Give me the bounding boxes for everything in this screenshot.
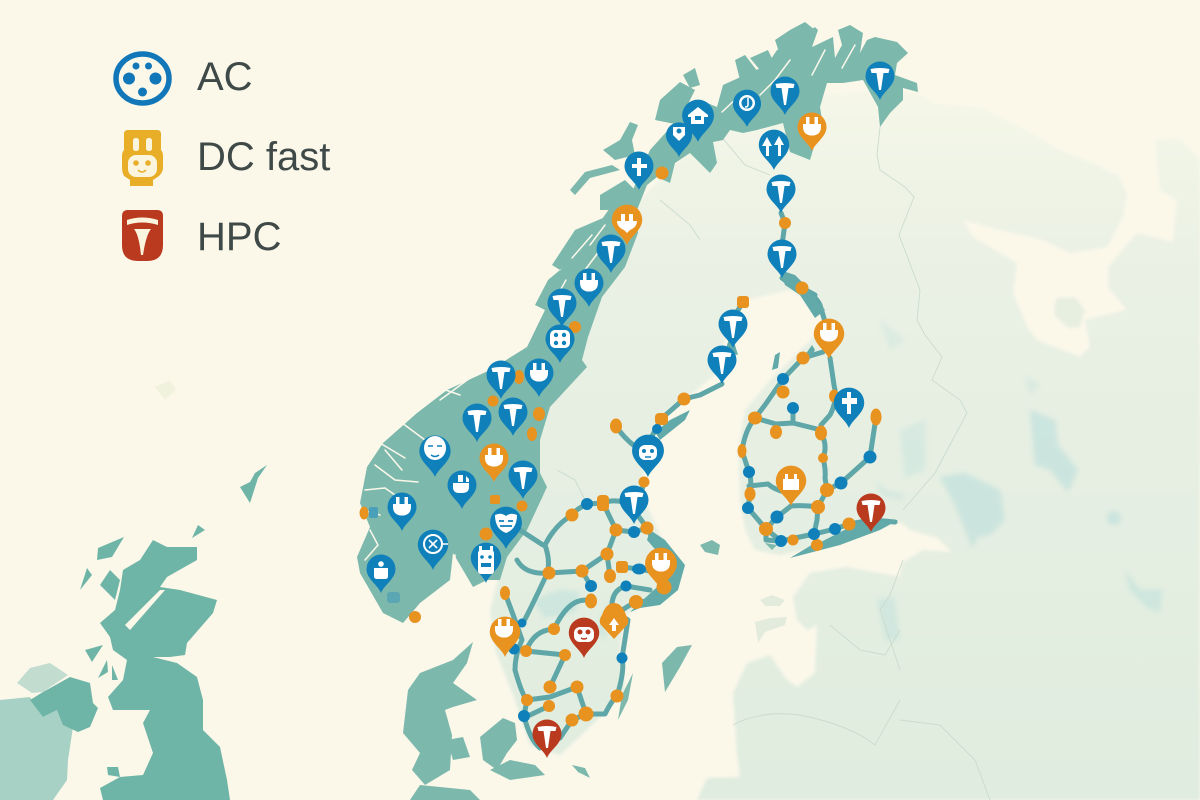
pin: AC southwest cup (366, 554, 396, 593)
pin: DC small arrow (600, 603, 628, 639)
pin: AC east Finland (834, 388, 864, 428)
pin: AC Bothnia T lower (708, 346, 736, 384)
Finland network (814, 358, 835, 534)
pin: DC Gothenburg (490, 617, 520, 657)
map: pale Baltic islands (755, 595, 787, 643)
pin: DC Oulu (814, 319, 844, 359)
road network (505, 213, 895, 748)
pin: AC face (419, 435, 451, 477)
legend label: AC: AC (197, 55, 253, 99)
pin: AC central Norway plug (524, 358, 554, 397)
pin: AC mask (490, 507, 522, 549)
pin: AC Lapland lower (768, 240, 796, 278)
pin: AC T right (498, 398, 528, 436)
icon: AC connector (116, 54, 169, 103)
map: Denmark and southern Baltic islands (403, 540, 777, 800)
icon: HPC connector (122, 210, 163, 261)
Sweden network (610, 510, 667, 625)
pin: AC Lapland upper (766, 174, 796, 213)
pin: AC Narvik house (682, 100, 714, 142)
pin: AC plug west (388, 492, 416, 531)
borders (557, 127, 990, 800)
pin: DC north (798, 112, 826, 151)
pin: AC far north (866, 62, 894, 100)
map: Ireland (0, 663, 98, 800)
pin: AC Tromsø (733, 90, 761, 127)
pin: HPC Helsinki (856, 494, 886, 532)
pin: AC roundel (418, 530, 448, 570)
legend label: HPC: HPC (197, 215, 281, 259)
pin: AC T left (462, 404, 492, 442)
map: pale land of Sweden, Finland, Russia and the Baltics (490, 90, 1200, 800)
pin: AC Trondheim T (548, 288, 576, 327)
charging stops: orange DC fast nodes (360, 166, 882, 726)
pin: AC four dots (546, 324, 574, 363)
pin: AC coast plug (574, 268, 604, 307)
pin: AC Lofoten shield (666, 122, 692, 157)
pin: AC Bothnia T upper (718, 310, 748, 348)
map: Great Britain (80, 465, 267, 800)
lakes (533, 320, 1162, 640)
legend (116, 54, 330, 261)
pin: DC Tampere (776, 466, 806, 506)
charging stops: blue AC nodes (369, 373, 876, 722)
pin: AC central Norway T (486, 360, 516, 399)
icon: DC fast connector (122, 130, 163, 186)
pin: AC twin arrows (759, 130, 789, 170)
pin: AC Gävle face (632, 435, 664, 477)
pin: AC robot (471, 543, 501, 583)
pin: HPC Malmö (532, 720, 562, 758)
pin: AC Finnmark (770, 76, 800, 115)
pin: DC Helgeland (612, 205, 642, 245)
pin: HPC Jönköping (569, 618, 599, 658)
map: Norway (357, 25, 918, 623)
pin: AC Uppsala T (620, 486, 648, 524)
legend label: DC fast: DC fast (197, 135, 330, 179)
pin: AC coast T (596, 234, 626, 273)
White Sea (963, 140, 1177, 357)
pin: DC Dovre (480, 444, 508, 482)
map: Faroe islands (155, 380, 176, 400)
pin: AC plus (624, 152, 654, 190)
map: Norwegian coast details (362, 22, 855, 575)
pin: AC cup (448, 470, 476, 509)
coastal ribbons (630, 270, 898, 612)
pin: AC T Hamar (508, 460, 538, 499)
pin: DC Stockholm (645, 548, 677, 590)
Bothnia west coast (782, 278, 826, 325)
